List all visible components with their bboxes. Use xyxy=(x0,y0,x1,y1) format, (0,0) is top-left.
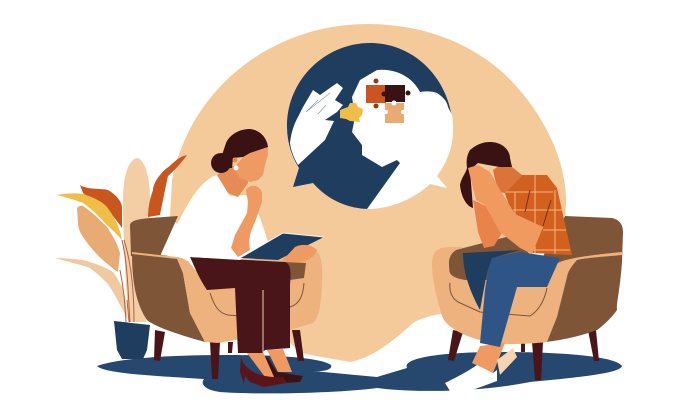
thought bubble xyxy=(287,43,453,209)
shoe front xyxy=(445,365,497,392)
shirt fold xyxy=(525,190,551,226)
chair inner back xyxy=(448,236,530,280)
hand finger lines xyxy=(306,93,330,114)
ear xyxy=(232,158,238,162)
chair back and side xyxy=(540,216,623,342)
hair xyxy=(222,129,268,168)
dark hair strip xyxy=(478,190,505,230)
therapist figure xyxy=(161,129,324,387)
leaf: orange left xyxy=(80,185,122,228)
jeans dark xyxy=(463,250,520,310)
therapist hand xyxy=(290,83,343,165)
leaf: orange upper right xyxy=(148,155,187,217)
chair front xyxy=(132,248,322,343)
forearm far xyxy=(473,200,505,248)
leaf: apricot xyxy=(77,206,120,272)
face xyxy=(234,147,268,182)
bubble navy disc xyxy=(287,43,452,209)
plaid shirt xyxy=(505,175,572,255)
plaid lines xyxy=(503,175,570,254)
background peach blob xyxy=(170,24,566,362)
puzzle: dark piece xyxy=(382,85,410,102)
chair side xyxy=(132,253,205,342)
ankle far xyxy=(267,349,292,372)
floor rugs xyxy=(97,352,622,393)
ankle near xyxy=(247,352,274,377)
puzzle: yellow piece xyxy=(340,103,363,122)
neck and chest xyxy=(217,165,248,197)
shoe near xyxy=(240,357,287,387)
chair right inner xyxy=(285,262,306,280)
patient figure xyxy=(445,142,572,392)
hair xyxy=(460,142,512,208)
chair legs xyxy=(154,330,304,379)
shoe far xyxy=(262,355,303,383)
hand on clipboard xyxy=(282,245,317,262)
chair seam xyxy=(450,283,547,316)
leaf: low tan xyxy=(55,258,128,320)
trousers xyxy=(190,257,290,353)
ankle xyxy=(472,343,505,373)
hair bun xyxy=(211,153,231,173)
neck skin xyxy=(493,165,522,193)
chair back xyxy=(130,216,190,262)
shoe back xyxy=(497,348,517,375)
arm xyxy=(231,186,262,257)
white head silhouette xyxy=(352,70,453,209)
clipboard xyxy=(240,233,324,260)
leaf: tan tall xyxy=(123,158,150,322)
chair front xyxy=(432,247,622,344)
plant xyxy=(55,155,187,359)
forearm near and hand xyxy=(468,165,543,254)
chair seam xyxy=(210,283,304,316)
puzzle: tan piece xyxy=(384,100,405,123)
patient chair xyxy=(432,216,623,380)
puzzle: orange piece xyxy=(366,78,386,108)
plant pot xyxy=(114,321,150,359)
therapist chair xyxy=(130,216,322,379)
plant stems xyxy=(120,240,134,322)
earring xyxy=(234,166,238,170)
white blouse xyxy=(161,175,268,260)
jeans light xyxy=(480,252,560,347)
leaf: yellow xyxy=(57,193,122,240)
trouser gap xyxy=(262,290,264,352)
chair legs xyxy=(448,330,599,380)
